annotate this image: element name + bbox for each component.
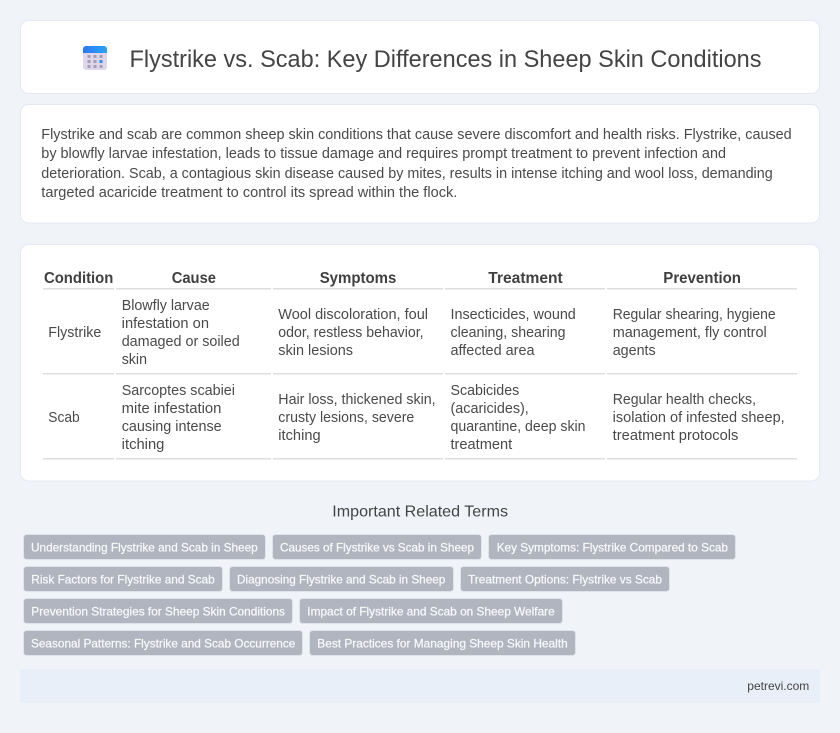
- title: Flystrike vs. Scab: Key Differences in Sheep Skin Conditions: [130, 46, 762, 73]
- tag: Best Practices for Managing Sheep Skin Health: [317, 636, 568, 650]
- table row: Flystrike: Flystrike: [48, 325, 101, 341]
- tag: [300, 598, 562, 624]
- tag: Key Symptoms: Flystrike Compared to Scab: [497, 540, 728, 554]
- tag: [24, 534, 266, 560]
- tag: Prevention Strategies for Sheep Skin Conditions: [31, 604, 285, 618]
- intro text block: [41, 127, 792, 201]
- table row: Flystrike: Insecticides, wound: [450, 307, 576, 323]
- table header row: Prevention: [663, 270, 741, 287]
- table row: Flystrike: infestation on: [122, 316, 209, 332]
- table row: Flystrike: skin lesions: [278, 343, 353, 359]
- table row: Flystrike: cleaning, shearing: [450, 325, 566, 341]
- table row: Scab: Sarcoptes scabiei: [122, 383, 235, 399]
- table row: Scab: Hair loss, thickened skin,: [278, 392, 436, 408]
- table row: Flystrike: management, fly control: [613, 325, 767, 341]
- tag: [272, 534, 482, 560]
- panel: comparison table: [20, 244, 820, 481]
- table row: Scab: quarantine, deep skin: [450, 419, 586, 435]
- intro text block: deterioration. Scab, a contagious skin disease caused by mites, results in intense itching and wool loss, demanding: [41, 166, 773, 182]
- table header row: [44, 270, 741, 287]
- table row: Flystrike: Blowfly larvae: [122, 298, 210, 314]
- table row: Scab: causing intense: [122, 419, 222, 435]
- heading: Important Related Terms: Important Related Terms: [332, 504, 508, 520]
- table row: Flystrike: affected area: [450, 343, 534, 359]
- table row: Scab: itching: [278, 428, 321, 444]
- table row: Scab: Regular health checks,: [613, 392, 756, 408]
- tag: [310, 630, 576, 656]
- table row: Scab: Scab: [48, 410, 80, 426]
- related term tags: [24, 534, 736, 656]
- intro text block: targeted acaricide treatment to control its spread within the flock.: [41, 185, 457, 201]
- table row: Flystrike: Wool discoloration, foul: [278, 307, 428, 323]
- footer source text: petrevi.com: [747, 679, 809, 693]
- table header row: Symptoms: [320, 270, 397, 287]
- table row: Flystrike: Regular shearing, hygiene: [613, 307, 776, 323]
- table row: Scab: isolation of infested sheep,: [613, 410, 785, 426]
- tag: [24, 566, 222, 592]
- intro text block: Flystrike and scab are common sheep skin conditions that cause severe discomfort and health risks. Flystrike, caused: [41, 127, 792, 143]
- table row: Flystrike: damaged or soiled: [122, 334, 240, 350]
- footer bar: [20, 669, 820, 703]
- tag: Seasonal Patterns: Flystrike and Scab Occurrence: [31, 636, 296, 650]
- tag: Impact of Flystrike and Scab on Sheep Welfare: [307, 604, 555, 618]
- tag: [488, 534, 736, 560]
- table header row: Condition: [44, 270, 113, 287]
- table header row: Cause: [172, 270, 216, 287]
- tag: Diagnosing Flystrike and Scab in Sheep: [237, 572, 446, 586]
- intro text block: by blowfly larvae infestation, leads to tissue damage and requires prompt treatment to prevent infection and: [41, 146, 726, 162]
- tag: Understanding Flystrike and Scab in Sheep: [31, 540, 258, 554]
- table row: Scab: [48, 383, 785, 453]
- table row: Scab: treatment: [450, 437, 512, 453]
- header panel: [20, 20, 820, 94]
- icon: calendar: [83, 46, 107, 70]
- table header row: Treatment: [488, 270, 563, 287]
- tag: Causes of Flystrike vs Scab in Sheep: [280, 540, 474, 554]
- table row: Flystrike: agents: [613, 343, 656, 359]
- tag: Risk Factors for Flystrike and Scab: [31, 572, 215, 586]
- table row: Scab: (acaricides),: [450, 401, 529, 417]
- table row: Flystrike: odor, restless behavior,: [278, 325, 424, 341]
- tag: [460, 566, 670, 592]
- table row: Flystrike: [48, 298, 776, 368]
- table row: Scab: mite infestation: [122, 401, 221, 417]
- table row: Flystrike: skin: [122, 352, 147, 368]
- tag: [230, 566, 454, 592]
- panel: introduction: [20, 104, 820, 223]
- tag: [24, 630, 302, 656]
- tag: Treatment Options: Flystrike vs Scab: [468, 572, 662, 586]
- tag: [24, 598, 292, 624]
- table row: Scab: Scabicides: [450, 383, 519, 399]
- table row: Scab: treatment protocols: [613, 428, 738, 444]
- table row: Scab: itching: [122, 437, 164, 453]
- table row: Scab: crusty lesions, severe: [278, 410, 414, 426]
